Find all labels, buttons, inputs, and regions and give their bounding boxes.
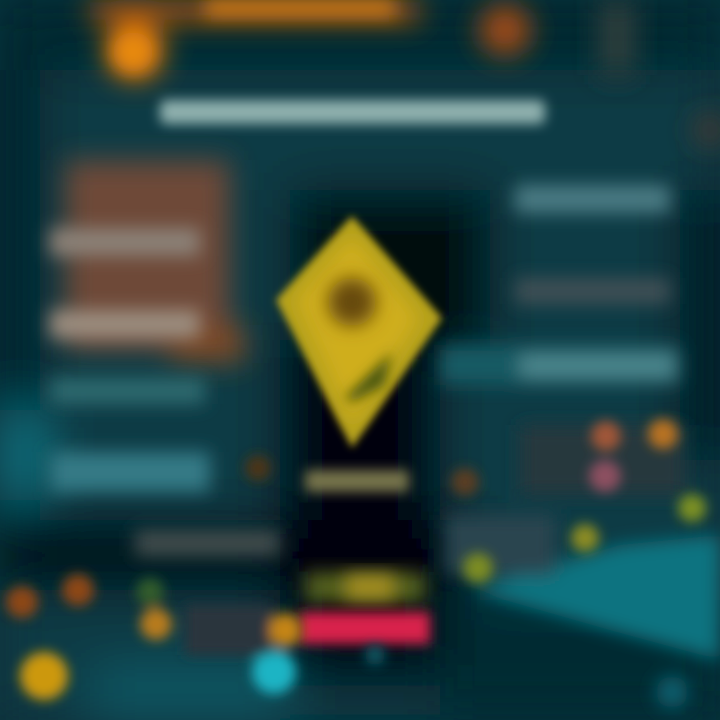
panel: left brown block	[65, 160, 245, 363]
right text blocks	[440, 185, 680, 385]
right teal table	[445, 425, 720, 708]
left text blocks	[50, 228, 280, 556]
icon: yellow diamond	[276, 216, 442, 448]
title	[160, 100, 545, 124]
top orange glow banner	[90, 0, 720, 146]
coloured dots	[6, 419, 706, 700]
diamond caption	[305, 470, 409, 492]
bottom centre red bar	[300, 572, 430, 644]
